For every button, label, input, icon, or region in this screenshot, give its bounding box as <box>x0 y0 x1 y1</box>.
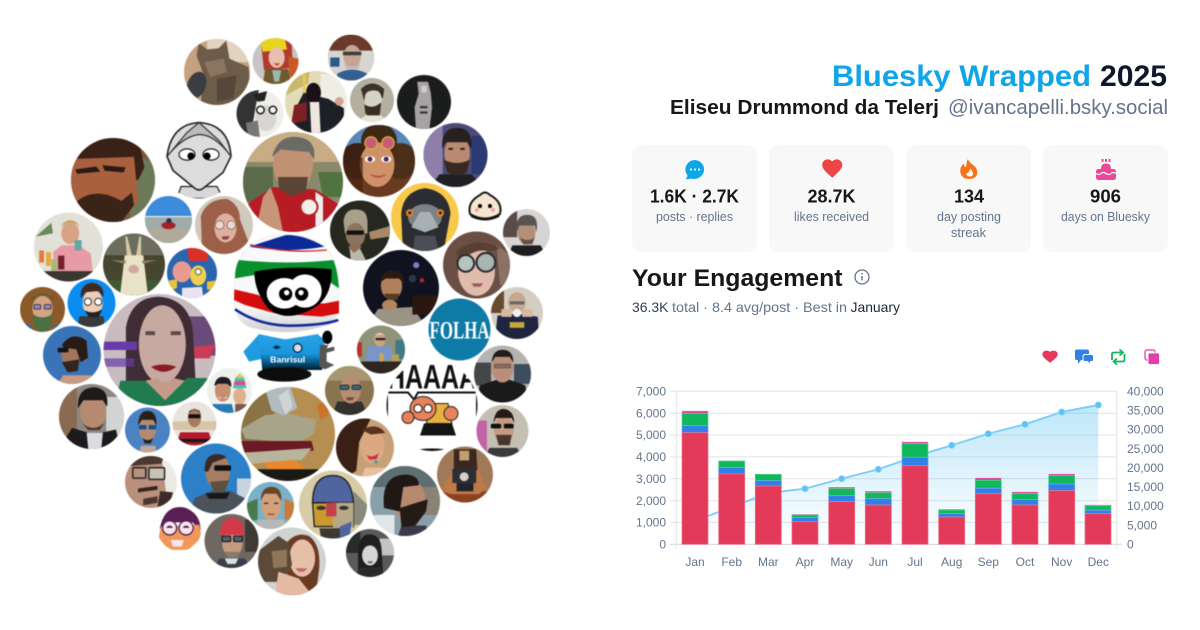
left axis labels: 5,000 <box>636 428 666 442</box>
avatar: person in the sea <box>145 196 192 243</box>
avatar: helmet mascot <box>234 235 339 382</box>
chart: monthly engagement <box>636 384 1164 569</box>
avatar: smiling woman <box>336 418 394 476</box>
avatar: Darth Vader costume <box>285 71 347 133</box>
avatar: cartoon girl Lola <box>166 121 232 200</box>
right axis labels: 30,000 <box>1127 423 1164 437</box>
avatar: beard drawing <box>350 78 394 122</box>
avatar: older man at table <box>357 326 405 374</box>
panel: likes received: 28.7K <box>808 186 856 206</box>
avatar: woman large selfie <box>104 294 216 406</box>
avatar: man in suit <box>59 384 124 449</box>
month labels: Jul <box>907 555 923 569</box>
month labels: Jan <box>685 555 705 569</box>
panel: days on Bluesky: 906 <box>1090 186 1121 206</box>
left axis labels: 2,000 <box>636 494 666 508</box>
avatar: bearded man in profile <box>370 466 440 536</box>
grid lines <box>670 391 1122 549</box>
icon: replies <box>1075 350 1094 364</box>
avatar: man with blue sunglasses <box>125 408 170 452</box>
month labels: Sep <box>978 555 999 569</box>
month labels: May <box>830 555 853 569</box>
panel: day posting streak: day posting <box>937 209 1001 224</box>
avatar: man with glasses, blue shirt <box>328 34 374 80</box>
avatar: man at night <box>363 250 439 326</box>
avatar: bald man in sunglasses <box>325 366 374 415</box>
avatar cluster <box>20 34 550 596</box>
right axis labels: 20,000 <box>1127 461 1164 475</box>
panel: posts and replies: 1.6K · 2.7K <box>650 186 739 206</box>
icon: reposts <box>1112 350 1124 364</box>
icon: chat bubble <box>685 160 704 179</box>
right axis labels: 40,000 <box>1127 384 1164 398</box>
title: 2025 <box>1100 60 1167 93</box>
avatar: bearded man with green beard <box>20 287 65 332</box>
avatar: helmet mascot: Banrisul <box>270 355 305 365</box>
avatar: painting face <box>299 470 367 538</box>
avatar: curly haired cartoon woman <box>339 123 419 197</box>
month labels: Apr <box>796 555 814 569</box>
engagement summary <box>632 299 900 315</box>
user name and handle: Eliseu Drummond da Telerj <box>670 97 939 119</box>
user name and handle: @ivancapelli.bsky.social <box>948 97 1168 119</box>
avatar: black and white woman <box>346 529 394 577</box>
engagement summary: January <box>850 299 900 315</box>
panel: posts and replies: posts · replies <box>656 209 733 224</box>
avatar: man with sunglasses in dark <box>330 200 390 260</box>
avatar: emu on yellow <box>391 183 459 251</box>
avatar: father and child with party hat <box>207 368 252 413</box>
panel: day posting streak: 134 <box>954 186 984 206</box>
cumulative line <box>695 402 1101 521</box>
avatar: bearded man with sunglasses, dark tee <box>476 405 528 457</box>
avatar: woman with large glasses <box>443 232 510 298</box>
left axis labels: 1,000 <box>636 516 666 530</box>
panel: day posting streak <box>906 145 1031 252</box>
month labels: Oct <box>1016 555 1035 569</box>
engagement summary: 36.3K <box>632 299 669 315</box>
avatar: cartoon with purple hair <box>158 507 202 551</box>
avatar: HAAAA comic: HAAAA <box>387 358 477 396</box>
panel: likes received <box>769 145 894 252</box>
left axis labels: 7,000 <box>636 384 666 398</box>
month labels: Nov <box>1051 555 1072 569</box>
avatar: man with grey hair <box>503 209 550 256</box>
left axis labels <box>636 384 666 552</box>
icon: heart <box>822 159 842 178</box>
avatar: bald man sunglasses blue sky <box>181 444 251 514</box>
avatar: cat with microphone <box>183 39 250 105</box>
avatar: cartoon rooster <box>167 248 217 298</box>
panel: posts and replies <box>632 145 757 252</box>
avatar: colorful hair woman <box>252 38 298 84</box>
right axis labels: 0 <box>1127 538 1134 552</box>
avatar: bun mascot <box>469 192 501 220</box>
icon: info <box>855 270 869 284</box>
avatar: man in red jacket <box>243 132 343 232</box>
title: Bluesky Wrapped <box>832 60 1091 93</box>
right axis labels: 25,000 <box>1127 442 1164 456</box>
right axis labels <box>1127 384 1164 552</box>
avatar: selfie with camera <box>437 446 493 502</box>
avatar: woman holding a cat <box>258 528 326 596</box>
engagement summary: total · 8.4 avg/post · Best in <box>672 299 847 315</box>
panel: days on Bluesky: days on Bluesky <box>1061 209 1150 224</box>
avatar: dark statue <box>397 75 451 129</box>
avatar: cartoon man on bright blue <box>68 279 116 327</box>
cumulative area <box>695 405 1098 544</box>
right axis labels: 10,000 <box>1127 499 1164 513</box>
month labels <box>685 555 1109 569</box>
avatar: smiling man on purple background <box>424 123 488 187</box>
left axis labels: 3,000 <box>636 472 666 486</box>
avatar: man in pink shirt with drinks <box>34 212 103 282</box>
avatar: anime man <box>247 482 294 529</box>
icon: cake <box>1096 159 1116 180</box>
avatar: HAAAA comic <box>386 358 478 452</box>
panel: days on Bluesky <box>1043 145 1168 252</box>
user name and handle <box>670 97 1168 119</box>
avatar: FOLHA logo: FOLHA <box>430 318 489 344</box>
panel: day posting streak: streak <box>951 225 986 240</box>
avatar: man with glasses closeup <box>125 456 177 508</box>
avatar: man in Flamengo shirt <box>172 402 216 446</box>
avatar: white goat <box>103 234 165 296</box>
avatar: man holding mug <box>491 287 543 339</box>
avatar: bearded man closeup <box>71 138 155 222</box>
avatar: crocodile with foil hat <box>241 387 335 481</box>
heading: your engagement: Your Engagement <box>632 265 843 292</box>
icon: likes <box>1042 351 1058 363</box>
right axis labels: 35,000 <box>1127 404 1164 418</box>
icon: quotes <box>1145 350 1160 364</box>
right axis labels: 5,000 <box>1127 518 1157 532</box>
left axis labels: 4,000 <box>636 450 666 464</box>
icon: flame <box>960 159 977 179</box>
avatar: man with red cap <box>204 514 258 568</box>
right axis labels: 15,000 <box>1127 480 1164 494</box>
avatar: woman with glasses and auburn hair <box>195 196 253 254</box>
avatar: man in black jacket <box>474 346 531 402</box>
month labels: Jun <box>869 555 888 569</box>
avatar: man in sunglasses, blue sky <box>43 326 101 384</box>
month labels: Mar <box>758 555 779 569</box>
left axis labels: 0 <box>659 538 666 552</box>
avatar: black and white woman with glasses <box>236 90 284 137</box>
panel: likes received: likes received <box>794 209 869 224</box>
month labels: Feb <box>721 555 742 569</box>
month labels: Dec <box>1088 555 1109 569</box>
month labels: Aug <box>941 555 962 569</box>
avatar: FOLHA logo <box>428 298 490 360</box>
stacked bars <box>682 411 1111 544</box>
left axis labels: 6,000 <box>636 406 666 420</box>
chart legend icons <box>1042 350 1160 364</box>
